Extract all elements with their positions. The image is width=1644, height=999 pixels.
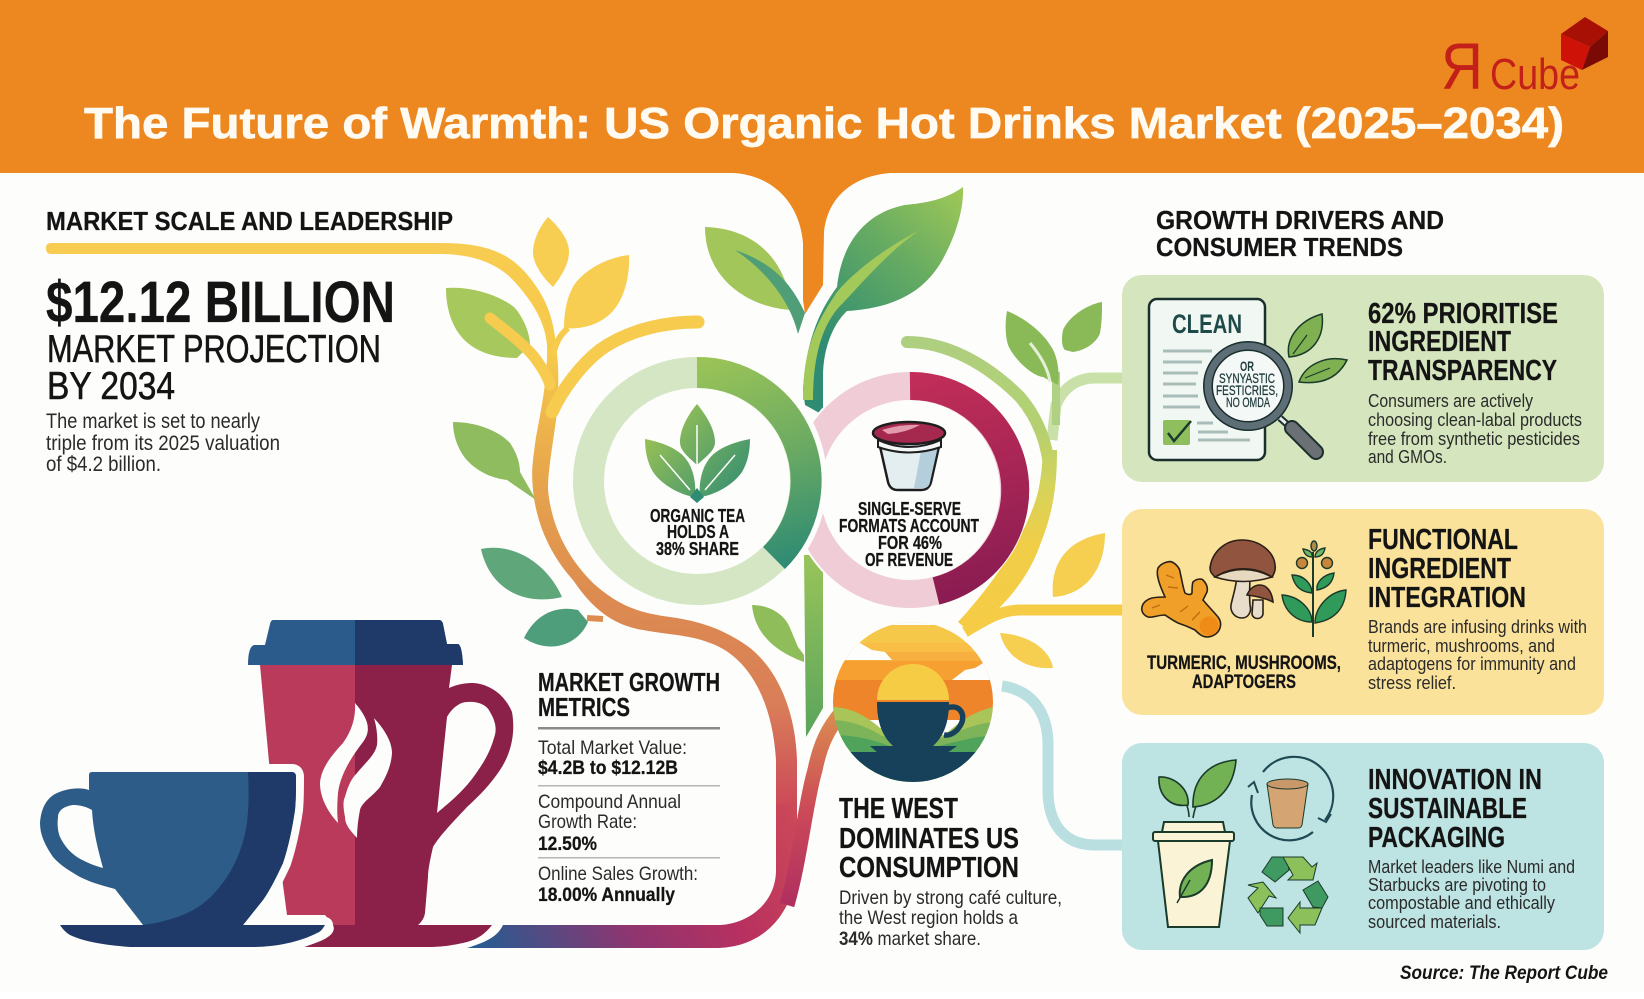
card text: FUNCTIONAL	[1368, 524, 1518, 556]
text block: the West: THE WEST	[839, 793, 958, 825]
tree: right branch with card links	[907, 342, 1122, 845]
ring: single-serve 46%	[790, 370, 1030, 610]
ring label: organic tea: HOLDS A	[667, 521, 729, 542]
card text: INGREDIENT	[1368, 553, 1511, 585]
ring label: organic tea	[650, 505, 745, 559]
card text: PACKAGING	[1368, 822, 1505, 854]
card text: Consumers are actively	[1368, 390, 1534, 411]
panel: market growth metrics: MARKET GROWTH	[538, 667, 720, 697]
heading: growth drivers: GROWTH DRIVERS AND	[1156, 205, 1444, 235]
text block: market description: The market is set to nearly	[46, 410, 260, 433]
card text: Market leaders like Numi and	[1368, 856, 1575, 877]
big stat: 12.12 billion	[46, 270, 395, 408]
ring: organic tea 38%	[567, 351, 827, 611]
heading: growth drivers: CONSUMER TRENDS	[1156, 232, 1403, 262]
logo: RCube	[1441, 17, 1608, 103]
card text: compostable and ethically	[1368, 892, 1556, 913]
text block: the West: the West region holds a	[839, 907, 1018, 929]
card text: choosing clean-labal products	[1368, 409, 1582, 430]
tree: yellow side branch	[552, 322, 698, 412]
card text: INNOVATION IN	[1368, 764, 1542, 796]
title: The Future of Warmth: US Organic Hot Drinks Market (2025–2034)	[84, 99, 1564, 148]
ring label: single-serve: SINGLE-SERVE	[858, 498, 961, 519]
logo: RCube: Cube	[1490, 50, 1580, 99]
card text: INTEGRATION	[1368, 582, 1526, 614]
caption: turmeric, mushrooms, adaptogers: TURMERIC, MUSHROOMS,	[1147, 653, 1341, 674]
ring label: organic tea: ORGANIC TEA	[650, 505, 745, 526]
card text	[1368, 764, 1575, 932]
panel: market growth metrics: Compound Annual	[538, 791, 681, 813]
caption: turmeric, mushrooms, adaptogers: ADAPTOGERS	[1192, 672, 1296, 693]
card text	[1368, 524, 1587, 693]
card text: INGREDIENT	[1368, 326, 1511, 358]
text block: market description: triple from its 2025 valuation	[46, 432, 280, 455]
text block: the West	[839, 793, 1062, 950]
card text	[1368, 298, 1582, 467]
panel: ingredient transparency	[1122, 275, 1604, 482]
icon: reusable cup with circular arrows	[1248, 757, 1333, 840]
panel: market growth metrics: METRICS	[538, 692, 630, 722]
card text: Starbucks are pivoting to	[1368, 874, 1546, 895]
illustration: blue cup and saucer	[40, 772, 325, 947]
text block: the West: 34% market share.	[839, 928, 981, 950]
icon: turmeric	[1142, 562, 1221, 637]
panel: market growth metrics: Growth Rate:	[538, 811, 637, 833]
icon: mushrooms	[1210, 540, 1275, 618]
ring label: single-serve	[839, 498, 980, 570]
panel: market growth metrics: $4.2B to $12.12B	[538, 757, 678, 779]
leaves: left plant	[446, 217, 804, 662]
card text: stress relief.	[1368, 672, 1456, 693]
tree: lower green stem	[804, 555, 823, 737]
ring label: single-serve: FOR 46%	[878, 532, 942, 553]
card text: 62% PRIORITISE	[1368, 298, 1558, 330]
ring label: organic tea: 38% SHARE	[656, 538, 739, 559]
icon: tea leaves	[645, 404, 750, 503]
source note: Source: The Report Cube	[1400, 963, 1608, 984]
card text: free from synthetic pesticides	[1368, 428, 1580, 449]
card text: adaptogens for immunity and	[1368, 653, 1576, 674]
card text: sourced materials.	[1368, 911, 1501, 932]
illustration: travel cup	[248, 620, 513, 947]
panel: market growth metrics: Online Sales Growth:	[538, 863, 698, 885]
big stat: 12.12 billion: $12.12 BILLION	[46, 270, 395, 335]
icon: sprout	[1159, 760, 1236, 818]
card text: Brands are infusing drinks with	[1368, 616, 1587, 637]
icon: steam flame	[320, 703, 392, 838]
header band with funnel	[0, 0, 1644, 314]
text block: the West: DOMINATES US	[839, 823, 1019, 855]
icon: clean label document with magnifier: FESTICRIES,	[1216, 382, 1278, 398]
ring label: single-serve: FORMATS ACCOUNT	[839, 515, 980, 536]
icon: single-serve cup	[873, 422, 945, 490]
icon: clean label document with magnifier: CLEAN	[1172, 309, 1242, 339]
icon: clean label document with magnifier: NO OMDA	[1226, 394, 1270, 410]
big stat: 12.12 billion: BY 2034	[47, 365, 175, 408]
panel: functional ingredients	[1122, 509, 1604, 715]
caption: turmeric, mushrooms, adaptogers	[1147, 653, 1341, 693]
text block: the West: Driven by strong café culture,	[839, 887, 1062, 909]
panel: market growth metrics: Total Market Value:	[538, 737, 687, 759]
tree: main trunk	[46, 243, 797, 948]
text block: market description: of $4.2 billion.	[46, 453, 161, 476]
icon: West sunset cup circle	[833, 622, 993, 782]
icon: recycle symbol	[1248, 857, 1328, 933]
heading: market scale and leadership: MARKET SCALE AND LEADERSHIP	[46, 206, 453, 236]
tree: branch to West circle	[787, 712, 842, 905]
icon: clean label document with magnifier	[1149, 299, 1347, 460]
card text: and GMOs.	[1368, 446, 1447, 467]
leaves: centre pair	[705, 187, 963, 415]
icon: adaptogen plant	[1282, 541, 1346, 637]
leaves: right plant	[1000, 302, 1105, 668]
panel: market growth metrics	[538, 667, 720, 906]
card text: SUSTAINABLE	[1368, 793, 1527, 825]
text block: the West: CONSUMPTION	[839, 852, 1019, 884]
icon: clean label document with magnifier: SYNYASTIC	[1219, 370, 1275, 386]
big stat: 12.12 billion: MARKET PROJECTION	[47, 328, 381, 371]
icon: compostable cup	[1153, 822, 1234, 927]
panel: market growth metrics: 12.50%	[538, 833, 597, 855]
heading: growth drivers	[1156, 205, 1444, 262]
panel: sustainable packaging	[1122, 743, 1604, 950]
icon: clean label document with magnifier: OR	[1240, 358, 1254, 374]
panel: market growth metrics: 18.00% Annually	[538, 884, 675, 906]
text block: market description	[46, 410, 280, 476]
card text: turmeric, mushrooms, and	[1368, 635, 1555, 656]
ring label: single-serve: OF REVENUE	[865, 549, 953, 570]
logo: RCube: Я	[1441, 29, 1483, 103]
card text: TRANSPARENCY	[1368, 355, 1557, 387]
